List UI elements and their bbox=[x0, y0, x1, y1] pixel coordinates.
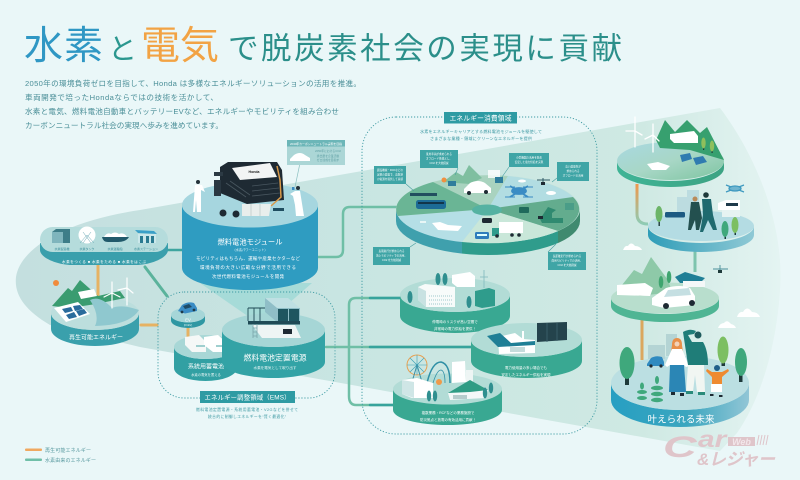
stationary fuel cell disc: 燃料電池定置電源 bbox=[244, 352, 307, 362]
title: 電気 bbox=[141, 25, 219, 68]
back building bbox=[452, 272, 475, 287]
solar panels bbox=[680, 153, 707, 165]
callout: marine: CO2 を大幅削減 bbox=[382, 258, 401, 262]
callout: construction and fixed power: 定置の発電で、高耐熱 bbox=[377, 172, 403, 176]
callout: air mobility bbox=[557, 162, 589, 181]
icon: hydrogen production unit bbox=[52, 229, 70, 243]
stationary fuel cell disc bbox=[222, 298, 325, 378]
trees bbox=[408, 273, 472, 308]
callout: heavy trucks: 長距離走行が求められる bbox=[553, 254, 582, 258]
module title: 燃料電池モジュール bbox=[218, 238, 282, 246]
future label: 叶えられる未来 bbox=[648, 414, 715, 426]
callout: passenger vehicles: オフロード性能とし、 bbox=[426, 156, 452, 160]
EV disc bbox=[171, 302, 205, 328]
EV disc: (FCEV) bbox=[184, 324, 192, 327]
passenger car bbox=[464, 181, 491, 195]
legend bbox=[25, 447, 96, 464]
callout: air mobility: 求められる bbox=[567, 169, 580, 173]
connectors: future column bbox=[637, 184, 695, 360]
dam and water bbox=[78, 289, 139, 326]
module subtitle: （水素パワーユニット） bbox=[232, 247, 268, 252]
server racks bbox=[537, 322, 567, 342]
panel: hospital and data disc bbox=[400, 270, 510, 333]
trees bbox=[620, 336, 747, 385]
icon: fuel cell power unit: Honda bbox=[249, 170, 259, 174]
panel: fuel cell module cylinder bbox=[182, 162, 318, 290]
panel: future disc - people and city bbox=[623, 185, 754, 273]
icon: engineer right bbox=[290, 186, 304, 216]
callout: air mobility: 高い発電性が bbox=[565, 164, 581, 168]
sector: marine bbox=[398, 209, 488, 242]
panel: future disc - renewable landscape bbox=[617, 117, 724, 187]
EMS description: 統合的に制御しエネルギーを“賢く最適化” bbox=[208, 414, 287, 419]
EMS label bbox=[200, 391, 295, 403]
wind turbines bbox=[626, 117, 659, 152]
intro text bbox=[25, 78, 361, 130]
caption bbox=[420, 410, 476, 422]
marine vessel bbox=[420, 221, 462, 231]
icon: hydrogen carrier ship bbox=[102, 232, 129, 242]
module description: 環境負荷の大きい広範な分野で活用できる bbox=[200, 264, 296, 271]
mountains bbox=[618, 257, 672, 296]
watermark: Car Web & Leisure: C bbox=[663, 431, 697, 464]
module description: 次世代燃料電池モジュールを開発 bbox=[212, 273, 284, 280]
icon: woman bbox=[665, 338, 689, 396]
title: で脱炭素社会の実現に貢献 bbox=[228, 32, 622, 66]
large drone bbox=[505, 186, 533, 197]
callout: delivery mobility: 小型機器の活用を進め bbox=[516, 156, 542, 160]
panel: future disc - family bbox=[611, 308, 760, 427]
hydrogen platform caption: 水素をつくる ■ 水素をためる ■ 水素をはこぶ bbox=[62, 259, 146, 264]
callout: heavy trucks bbox=[548, 252, 586, 270]
module description bbox=[196, 255, 300, 280]
mobility sector disc bbox=[396, 165, 580, 255]
truck bbox=[718, 200, 740, 217]
caption: 防災拠点と放電の有効活用に貢献！ bbox=[420, 417, 476, 422]
watermark: Car Web & Leisure: &レジャー bbox=[697, 450, 776, 469]
panel: factory and server disc bbox=[471, 322, 582, 378]
trees bbox=[656, 206, 738, 239]
hydrogen icon labels: 水素ステーション bbox=[134, 246, 158, 251]
sector: construction bbox=[488, 197, 579, 231]
disc hub bbox=[472, 204, 502, 216]
train bbox=[665, 212, 685, 218]
callout: heavy trucks: CO2 を大幅削減 bbox=[557, 263, 577, 267]
watermark: Car Web & Leisure bbox=[663, 426, 776, 469]
callout: 2040 carbon neutral: 排出量を企業活動 bbox=[317, 154, 339, 158]
panel: commercial facilities disc bbox=[393, 355, 502, 425]
title: 水素 bbox=[24, 25, 103, 68]
consumption area description: さまざまな業種・領域にクリーンなエネルギーを提供 bbox=[430, 135, 532, 141]
trees bbox=[427, 382, 493, 402]
panel: energy management area bbox=[158, 292, 335, 419]
battery disc: 系統用蓄電池 bbox=[188, 362, 224, 370]
icon: hydrogen tank bbox=[78, 226, 96, 244]
panel: renewable energy disc bbox=[51, 278, 139, 346]
callout: passenger vehicles: CO2 を大幅低減 bbox=[429, 161, 449, 165]
caption: 非常時の電力供給を提供！ bbox=[434, 326, 476, 331]
icon: man shading eyes bbox=[683, 330, 708, 395]
callout: 2040 carbon neutral: ゼロ達成を目指す bbox=[317, 158, 339, 162]
panel: hydrogen supply platform bbox=[40, 226, 168, 265]
hydrogen icon labels: 水素タンク bbox=[79, 246, 95, 251]
intro text: 水素と電気、燃料電池自動車とバッテリーEVなど、エネルギーやモビリティを組み合わせ bbox=[25, 106, 339, 116]
hydrogen icon labels bbox=[54, 246, 158, 251]
back mountains and plant bbox=[442, 165, 503, 186]
small drone bbox=[537, 178, 550, 185]
callout: passenger vehicles: 乗用車両が求められる bbox=[426, 152, 452, 156]
ship bbox=[647, 162, 670, 170]
panel: future disc - mobility at home bbox=[611, 257, 719, 322]
caption bbox=[432, 319, 478, 331]
communications tower building bbox=[475, 270, 495, 308]
EMS description: 燃料電池定置電源・系統用蓄電池・V2Gなどを併せて bbox=[196, 407, 298, 412]
callout: construction and fixed power bbox=[374, 166, 406, 184]
background cone spreading from left to right bbox=[16, 108, 781, 451]
truck bbox=[492, 222, 523, 238]
consumption area description bbox=[420, 128, 542, 141]
title: と bbox=[108, 34, 137, 66]
consumption area description: 水素をエネルギーキャリアとする燃料電池モジュールを駆使して bbox=[420, 128, 542, 134]
caption: 複数業務・RCFなどの業務施設で bbox=[422, 410, 475, 415]
callout: construction and fixed power: 建設機械・RCFなどの bbox=[377, 168, 403, 172]
tall white buildings bbox=[452, 361, 473, 383]
callout: air mobility: オフロードの活用 bbox=[563, 174, 584, 178]
callout: passenger vehicles bbox=[420, 150, 458, 168]
icon: solar panels bbox=[54, 302, 90, 322]
funnel from fuel cell module down to stationary power bbox=[200, 283, 312, 326]
icon: hydrogen station bbox=[135, 230, 157, 243]
ferris wheel bbox=[407, 355, 427, 382]
intro text: 車両開発で培ったHondaならではの技術を活かして、 bbox=[25, 92, 218, 102]
module description: モビリティはもちろん、運輸や産業セクターなど bbox=[196, 255, 300, 262]
icon: small drone bbox=[713, 265, 728, 273]
factory bbox=[675, 272, 705, 287]
small car bbox=[647, 356, 664, 368]
trees bbox=[659, 271, 671, 288]
clouds bbox=[718, 308, 760, 328]
callout: marine bbox=[373, 247, 410, 265]
callout: construction and fixed power: の電源を提供して貢献 bbox=[377, 177, 403, 181]
faint buildings bbox=[677, 190, 699, 212]
green roof hall bbox=[448, 380, 488, 400]
connectors: left energy lines bbox=[98, 207, 472, 405]
icon: wind turbines bbox=[104, 278, 133, 308]
excavator bbox=[519, 203, 574, 223]
intro text: カーボンニュートラル社会の実現へ歩みを進めています。 bbox=[25, 120, 223, 130]
caption: 停電時のリスクが高い空間で bbox=[432, 319, 478, 324]
left white building bbox=[402, 378, 442, 398]
renewable label: 再生可能エネルギー bbox=[69, 334, 123, 342]
battery disc: 水素の電気を蓄える bbox=[191, 372, 221, 377]
mountains bbox=[656, 120, 724, 160]
train bbox=[410, 193, 446, 209]
sector: rail bbox=[396, 182, 488, 216]
consumption area label bbox=[444, 112, 517, 124]
battery disc bbox=[174, 335, 237, 381]
icon: sun bbox=[53, 280, 59, 286]
caption bbox=[502, 365, 551, 377]
hydrogen icon labels: 水素製造機 bbox=[54, 246, 70, 251]
EMS label: エネルギー調整領域（EMS） bbox=[204, 392, 290, 402]
EV disc: EV bbox=[185, 318, 191, 322]
hydrogen icon labels: 水素運搬船 bbox=[107, 246, 123, 251]
faint city bbox=[648, 334, 677, 359]
trees bbox=[701, 138, 714, 153]
legend: 再生可能エネルギー bbox=[45, 447, 91, 454]
EMS description bbox=[196, 407, 298, 419]
factory bbox=[487, 331, 535, 354]
panel: energy consumption area bbox=[362, 112, 597, 434]
callout: marine: 海上モビリティでの活用、 bbox=[376, 254, 407, 258]
intro text: 2050年の環境負荷ゼロを目指して、Honda は多様なエネルギーソリューションの活用を推進。 bbox=[25, 78, 361, 88]
icon: walking couple bbox=[688, 192, 717, 232]
consumption area label: エネルギー消費領域 bbox=[450, 114, 512, 122]
sector: back land bbox=[433, 175, 508, 209]
mountains bbox=[52, 280, 125, 308]
icon: child bbox=[706, 365, 729, 397]
callout: 2040 carbon neutral: 2040年カーボンニュートラル実現を目指 bbox=[290, 141, 342, 146]
plants bbox=[637, 376, 663, 402]
icon: white car bbox=[652, 286, 695, 309]
callout leader lines bbox=[406, 167, 557, 252]
callout: marine: 長期航行が求められる bbox=[379, 249, 405, 253]
bus and car bbox=[475, 218, 492, 239]
watermark: Car Web & Leisure: Web bbox=[732, 437, 751, 447]
roller coaster bbox=[427, 362, 450, 383]
icon: engineer left bbox=[193, 180, 205, 212]
stationary fuel cell disc: 水素を電気として取り出す bbox=[253, 365, 297, 370]
cloud bbox=[623, 244, 642, 250]
caption: 安定したエネルギー供給を実現 bbox=[502, 372, 551, 377]
callout: delivery mobility: 安定した電力供給を実現 bbox=[515, 160, 544, 164]
callout: heavy trucks: 商用モビリティでの活用、 bbox=[552, 258, 582, 262]
clouds bbox=[518, 180, 556, 195]
caption: 電力使用量の多い場合でも bbox=[505, 365, 547, 370]
icon: drone bbox=[726, 185, 744, 192]
building bbox=[670, 131, 698, 143]
sector: air bbox=[488, 176, 573, 209]
callout: 2040 carbon neutral: 2050年におけるCO2 bbox=[315, 149, 341, 153]
low house bbox=[617, 283, 653, 296]
legend: 水素由来のエネルギー bbox=[45, 457, 96, 464]
callout: delivery mobility bbox=[509, 153, 549, 167]
watermark: Car Web & Leisure: ar bbox=[698, 426, 728, 452]
callout: 2040 carbon neutral bbox=[287, 140, 345, 187]
hospital building bbox=[418, 284, 455, 307]
sector: road freight bbox=[462, 209, 558, 243]
title bbox=[24, 25, 622, 68]
